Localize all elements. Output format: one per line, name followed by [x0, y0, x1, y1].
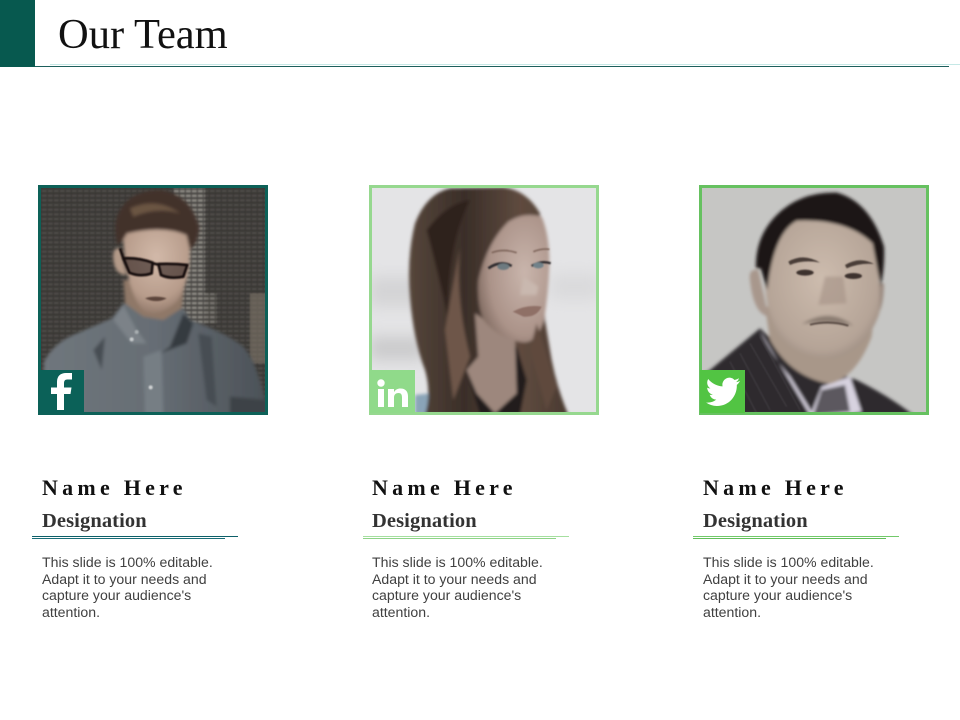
divider 1 — [32, 536, 238, 539]
description 2: Adapt it to your needs and — [372, 571, 537, 587]
portrait frame — [699, 185, 929, 415]
description 3: attention. — [703, 604, 761, 620]
name 1: Name Here — [42, 475, 187, 500]
description 1: This slide is 100% editable. — [42, 554, 213, 570]
header rule — [35, 64, 960, 67]
header accent block — [0, 0, 35, 67]
divider 2 — [363, 536, 569, 539]
description 1: attention. — [42, 604, 100, 620]
description 3: capture your audience's — [703, 587, 852, 603]
portrait frame — [369, 185, 599, 415]
designation 2: Designation — [372, 510, 477, 532]
name 3: Name Here — [703, 475, 848, 500]
description 3 — [703, 554, 874, 620]
name 2: Name Here — [372, 475, 517, 500]
description 2: This slide is 100% editable. — [372, 554, 543, 570]
panel: team member 1 — [38, 185, 268, 415]
title: Our Team — [58, 11, 228, 58]
portrait: woman with long hair — [372, 188, 596, 412]
description 3: This slide is 100% editable. — [703, 554, 874, 570]
icon: twitter — [700, 370, 745, 413]
panel: team member 3 — [699, 185, 929, 415]
panel: team member 2 — [369, 185, 599, 415]
description 2: capture your audience's — [372, 587, 521, 603]
portrait: young man with glasses — [41, 188, 265, 412]
description 2: attention. — [372, 604, 430, 620]
portrait: man in suit — [702, 188, 926, 412]
portrait frame — [38, 185, 268, 415]
description 3: Adapt it to your needs and — [703, 571, 868, 587]
designation 3: Designation — [703, 510, 808, 532]
icon: linkedin — [372, 370, 415, 412]
designation 1: Designation — [42, 510, 147, 532]
description 1: capture your audience's — [42, 587, 191, 603]
description 1 — [42, 554, 213, 620]
description 1: Adapt it to your needs and — [42, 571, 207, 587]
icon: facebook — [41, 370, 84, 412]
description 2 — [372, 554, 543, 620]
divider 3 — [693, 536, 899, 539]
